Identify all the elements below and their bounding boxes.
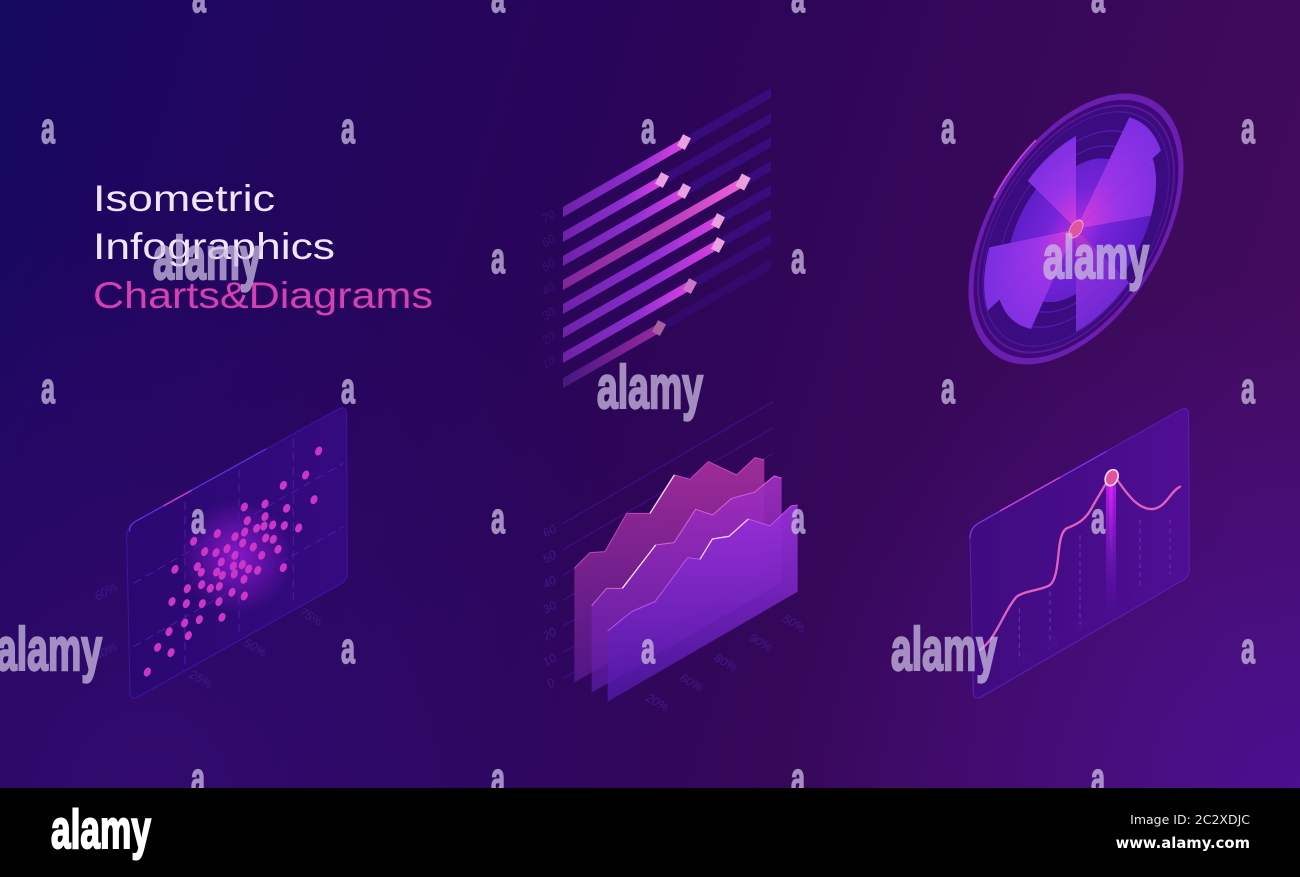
- watermark letters: a: [191, 494, 205, 543]
- watermark letters: a: [1241, 104, 1255, 153]
- panel: bar chart: 50: [539, 256, 558, 275]
- front area: [608, 505, 798, 702]
- watermark logos: alamy: [597, 354, 703, 421]
- title: Infographics: [93, 226, 335, 267]
- watermark logos: alamy: [153, 225, 261, 292]
- watermark letters: a: [341, 624, 355, 673]
- watermark letters: a: [791, 754, 805, 803]
- footer logo: alamy: [51, 798, 151, 860]
- watermark letters: a: [941, 364, 955, 413]
- panel: line chart: [970, 409, 1189, 698]
- panel: bar chart: 70: [539, 207, 558, 226]
- panel: bar chart: 10: [539, 353, 558, 372]
- axis labels: 50%: [780, 611, 808, 636]
- scatter dots: [142, 445, 324, 678]
- title: Isometric: [93, 178, 275, 219]
- back area: [574, 458, 764, 682]
- watermark letters: a: [491, 234, 505, 283]
- axis labels: 40: [1101, 599, 1120, 618]
- middle area: [592, 476, 782, 693]
- panel: bar chart: [538, 88, 771, 388]
- axis labels: 60: [1159, 566, 1178, 585]
- watermark letters: a: [41, 104, 55, 153]
- watermark letters: a: [941, 104, 955, 153]
- watermark letters: a: [641, 624, 655, 673]
- axis labels: 60%: [677, 670, 706, 695]
- watermark letters: a: [341, 364, 355, 413]
- axis labels: 80%: [712, 650, 740, 675]
- axis labels: 0: [544, 675, 558, 691]
- axis labels: 10: [1013, 650, 1032, 669]
- watermark letters: a: [1241, 624, 1255, 673]
- peak marker: [1103, 468, 1121, 488]
- highlight arc: [994, 140, 1036, 198]
- panel: area chart: [539, 402, 808, 715]
- axis labels: 20: [1042, 634, 1062, 653]
- watermark letters: a: [641, 104, 655, 153]
- panel: scatter plot: [92, 408, 347, 698]
- watermark letters: a: [1241, 364, 1255, 413]
- axis labels: 30: [1072, 616, 1091, 635]
- axis labels: 60%: [92, 579, 120, 604]
- watermark letters: a: [791, 234, 805, 283]
- axis labels: 50%: [241, 635, 269, 660]
- watermark letters: a: [41, 364, 55, 413]
- axis labels: 20: [539, 625, 559, 644]
- axis labels: 30: [540, 598, 559, 617]
- axis labels: [1013, 566, 1178, 669]
- website: www.alamy.com: [1116, 835, 1250, 852]
- center dot: [1069, 217, 1083, 241]
- watermark letters: a: [1091, 494, 1105, 543]
- panel: radar chart: [971, 51, 1181, 407]
- watermark logos: alamy: [0, 616, 102, 683]
- axis labels: 10: [540, 650, 559, 669]
- panel: bar chart: 20: [538, 329, 558, 348]
- axis labels: 25%: [186, 667, 215, 691]
- footer bar: [0, 788, 1300, 877]
- line curve: [980, 480, 1180, 650]
- axis labels: 40: [540, 573, 559, 592]
- axis labels: 50: [1130, 582, 1149, 601]
- watermark logos: [0, 224, 1149, 683]
- radar sectors: [984, 87, 1161, 385]
- axis labels: 75%: [297, 605, 325, 629]
- axis labels: 50: [540, 547, 559, 566]
- watermark letters: a: [791, 494, 805, 543]
- watermark letters: a: [491, 494, 505, 543]
- title: Charts&Diagrams: [93, 275, 433, 316]
- axis labels: 40%: [92, 639, 120, 664]
- watermark logos: alamy: [891, 616, 997, 683]
- axis labels: [92, 579, 325, 691]
- watermark letters: a: [191, 754, 205, 803]
- watermark logos: alamy: [1043, 224, 1149, 291]
- panel: bar chart: 40: [539, 280, 558, 299]
- watermark letters: a: [341, 104, 355, 153]
- axis labels: [539, 521, 808, 715]
- panel: bar chart: 30: [539, 304, 558, 323]
- axis labels: 90%: [747, 630, 775, 655]
- title: [93, 178, 433, 316]
- highlight beam: [1106, 483, 1116, 613]
- image id: Image ID: 2C2XDJC: [1130, 812, 1250, 827]
- panel: bar chart: 60: [539, 231, 558, 250]
- axis labels: 60: [540, 521, 559, 540]
- axis labels: 20%: [643, 690, 672, 715]
- watermark letters: a: [491, 754, 505, 803]
- watermark letters: a: [1091, 754, 1105, 803]
